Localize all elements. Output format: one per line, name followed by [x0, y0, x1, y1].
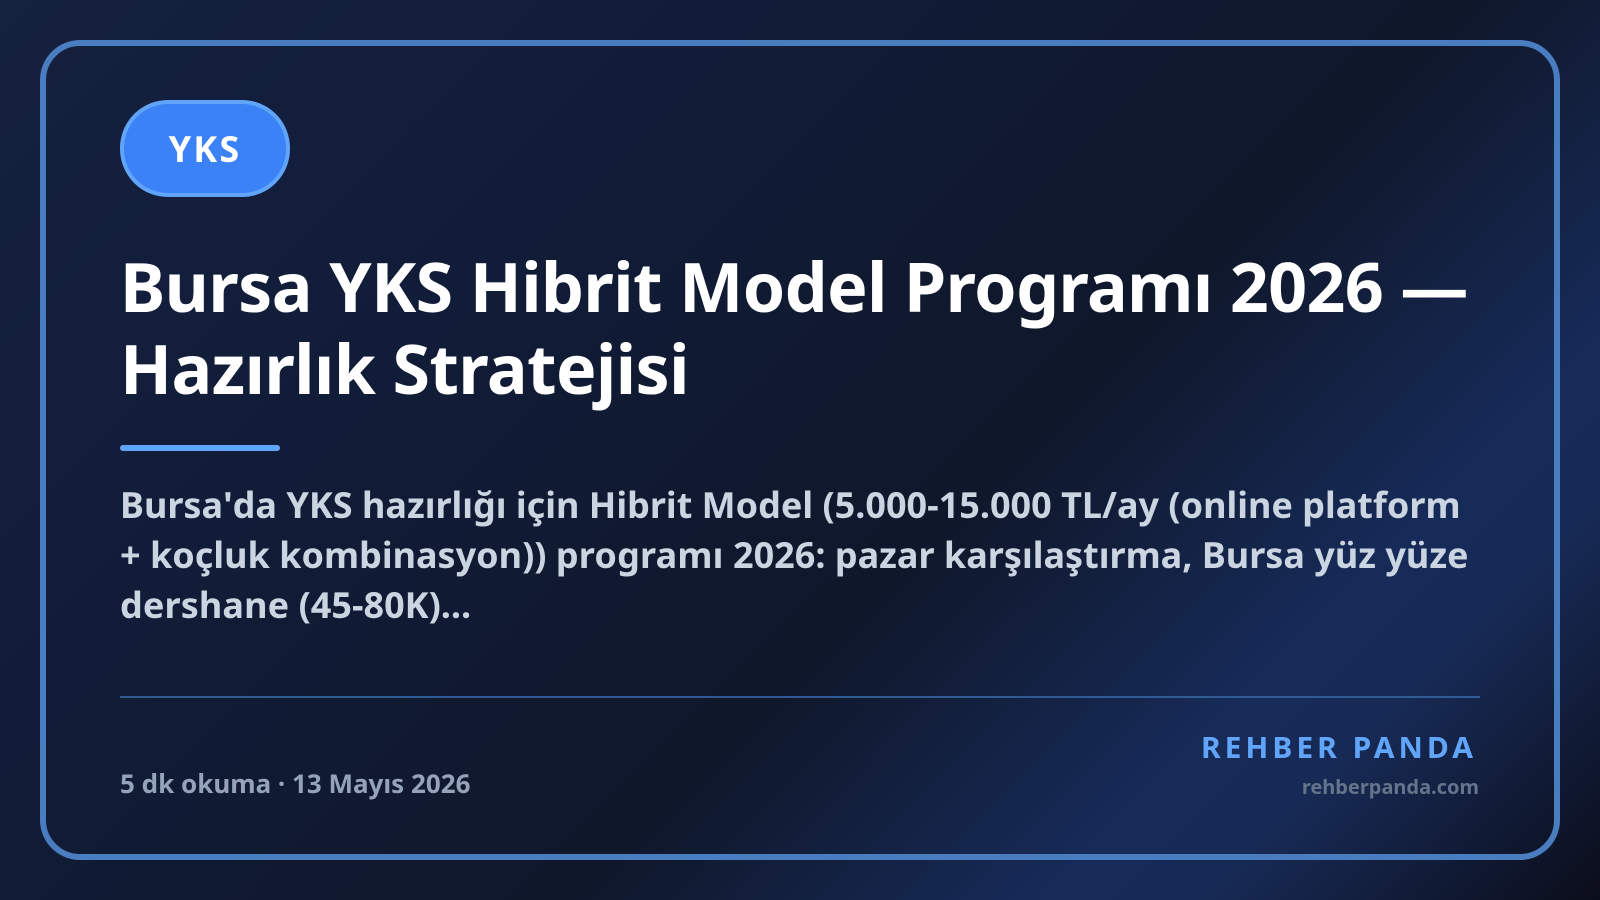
- badge: YKS: YKS: [169, 124, 241, 173]
- description: Bursa'da YKS hazırlığı için Hibrit Model (5.000-15.000 TL/ay (online platform: [120, 480, 1461, 529]
- title: [120, 239, 1468, 414]
- meta: reading time and date: 5 dk okuma · 13 Mayıs 2026: [120, 765, 470, 801]
- title: Bursa YKS Hibrit Model Programı 2026 —: [120, 239, 1468, 332]
- description: dershane (45-80K)...: [120, 580, 471, 629]
- title: Hazırlık Stratejisi: [120, 321, 689, 414]
- badge: YKS: [120, 100, 290, 197]
- brand url: rehberpanda.com: [1302, 773, 1479, 800]
- description: + koçluk kombinasyon)) programı 2026: pazar karşılaştırma, Bursa yüz yüze: [120, 530, 1469, 579]
- description: [120, 480, 1469, 629]
- accent bar: [120, 445, 280, 451]
- brand name: REHBER PANDA: [1201, 726, 1477, 767]
- footer divider: [120, 696, 1480, 698]
